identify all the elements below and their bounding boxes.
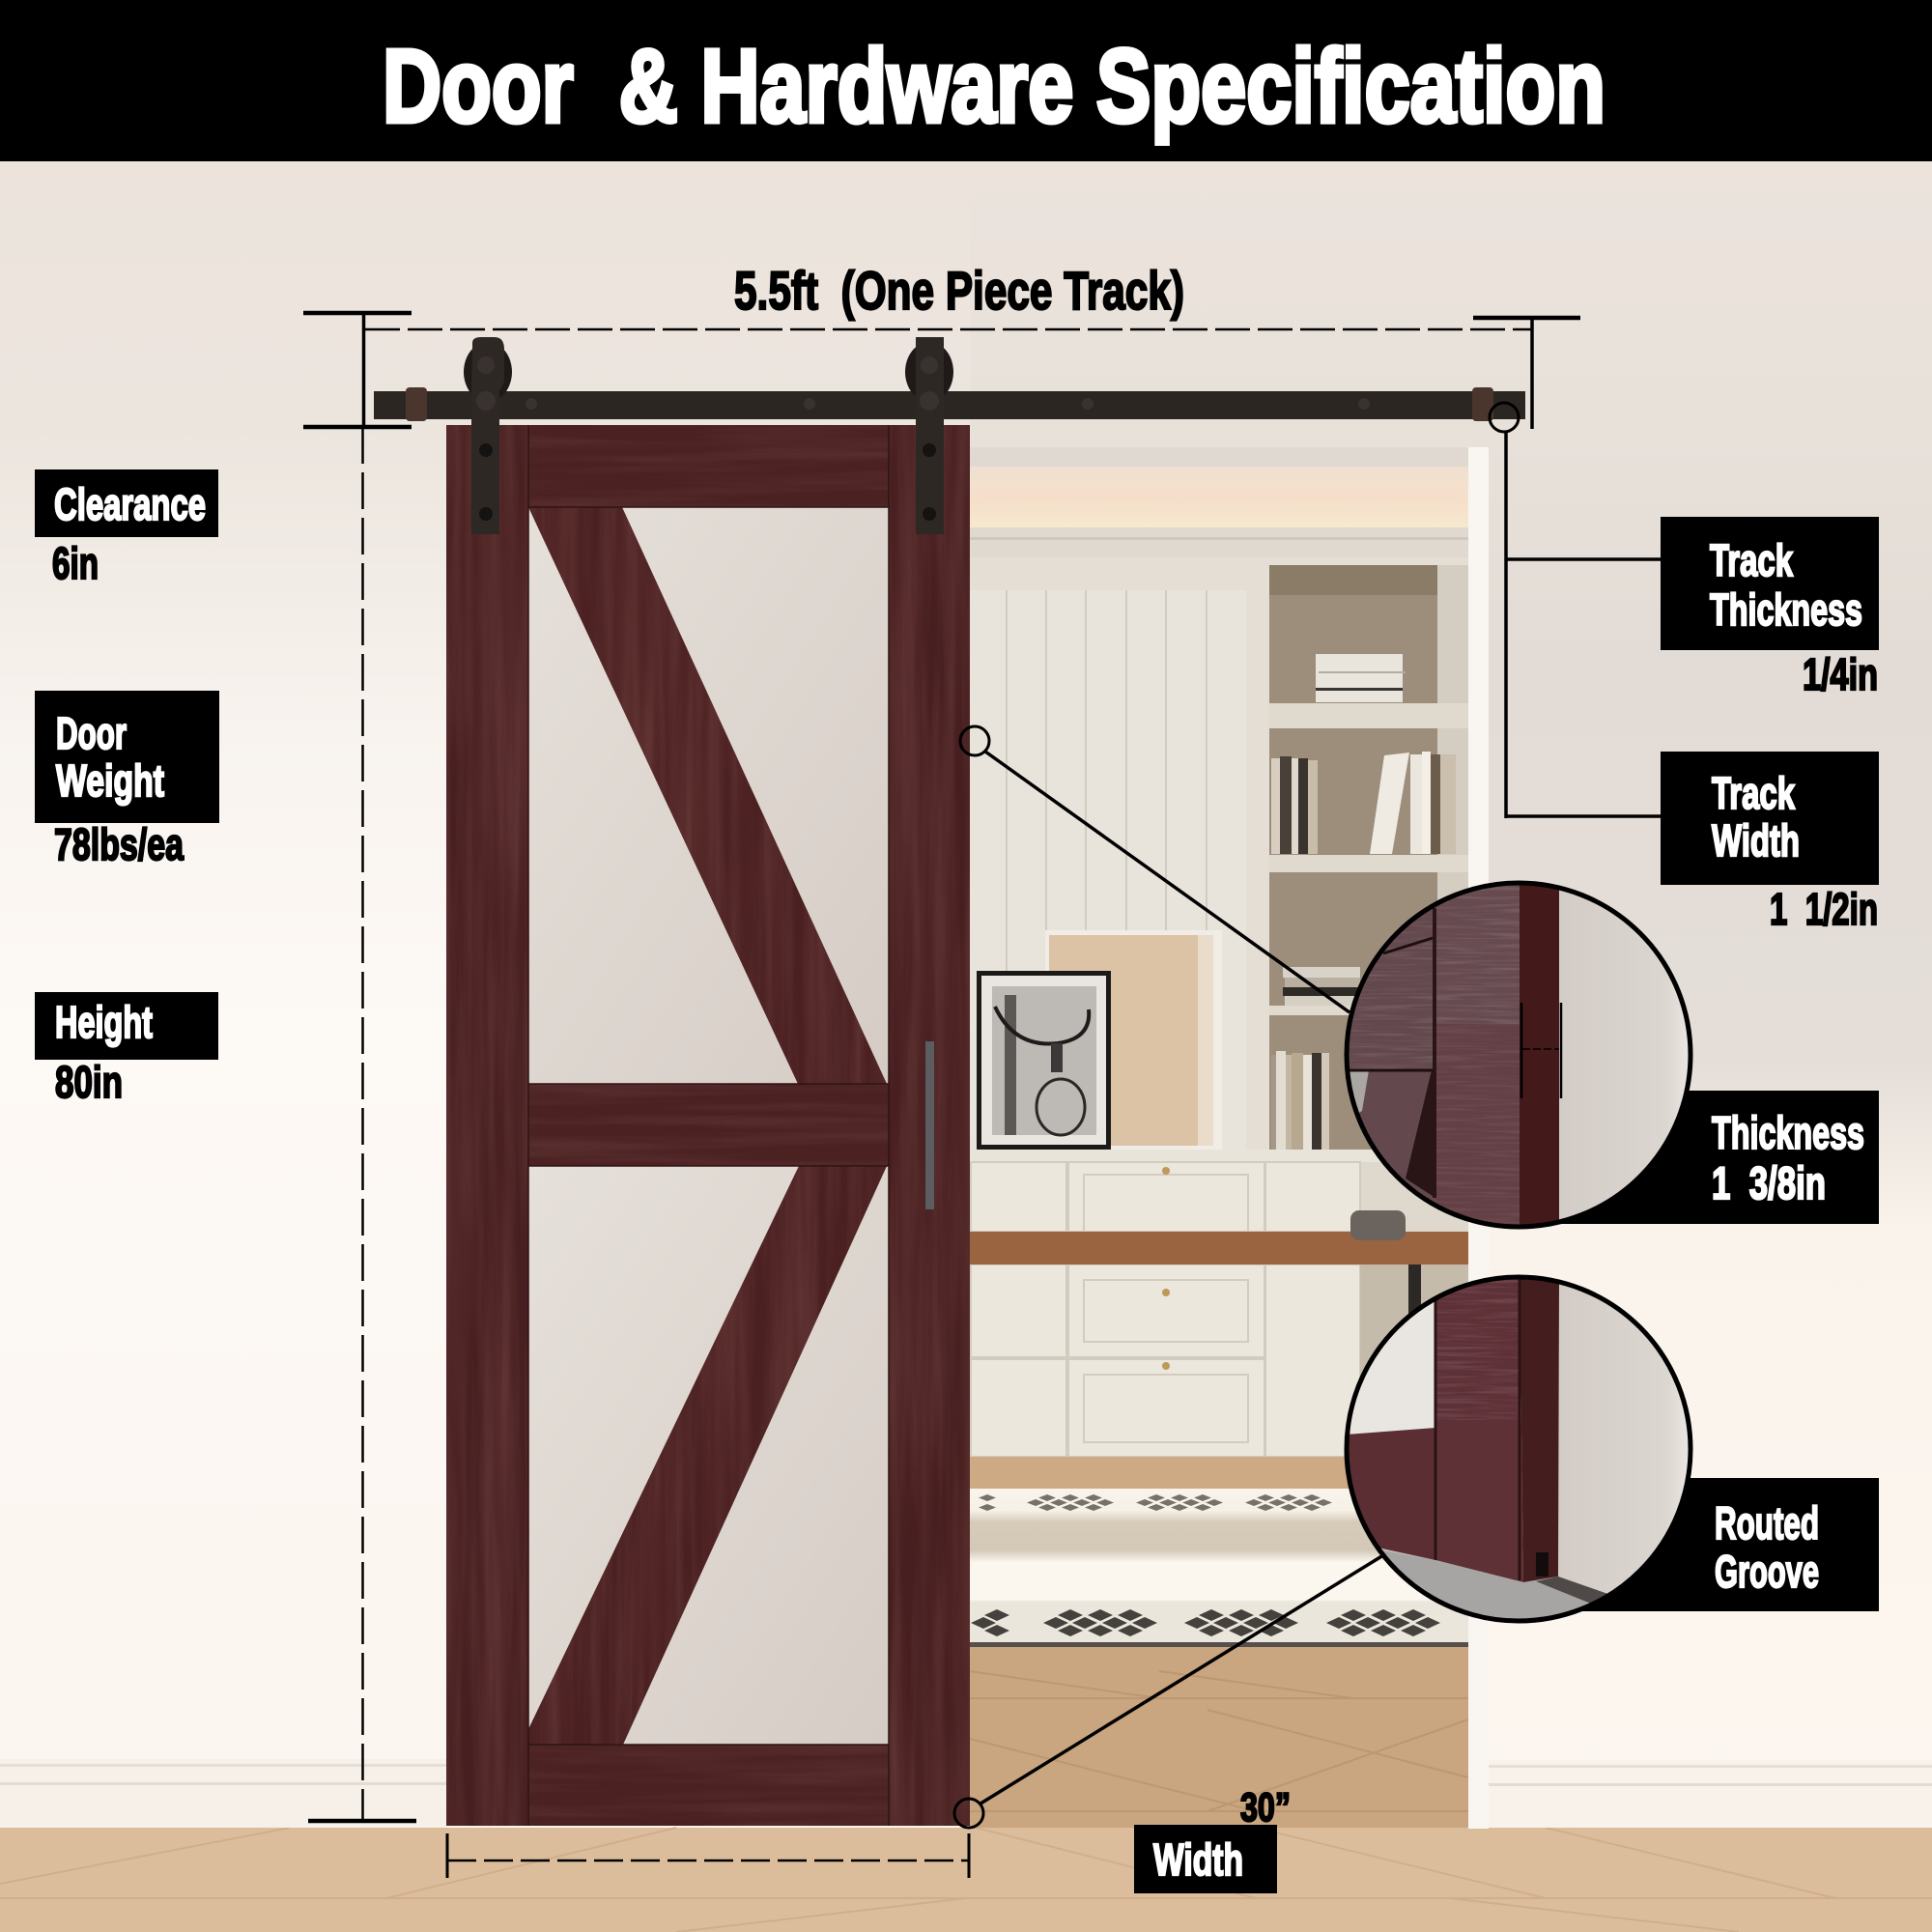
doorway interior room [970, 447, 1489, 1829]
floor [0, 1828, 1932, 1932]
room floor [970, 1457, 1468, 1491]
title banner: Door & Hardware Specification [383, 27, 1605, 144]
framed bicycle photo [977, 971, 1111, 1150]
label: track thickness: Thickness [1710, 584, 1862, 635]
rug [970, 1489, 1468, 1647]
label: width [1134, 1784, 1291, 1893]
label: clearance: Clearance [54, 479, 206, 529]
label: clearance [35, 469, 218, 588]
cabinets [970, 1150, 1468, 1464]
label: thickness [1546, 1091, 1879, 1224]
label: clearance: 6in [52, 538, 99, 588]
label: width: 30” [1240, 1784, 1291, 1830]
callout lines [954, 403, 1661, 1828]
label: height: 80in [55, 1057, 123, 1107]
art print [1045, 930, 1222, 1150]
label: routed groove [1546, 1478, 1879, 1611]
barn door [446, 425, 970, 1826]
door jamb [1468, 447, 1489, 1829]
dimension: clearance and height [303, 313, 416, 1821]
books [1271, 654, 1456, 1150]
label: door weight: Weight [56, 755, 164, 806]
shelving unit [1246, 557, 1468, 1162]
diagonal braces [528, 507, 889, 1745]
dimension: door width [447, 1833, 969, 1878]
label: height: Height [55, 997, 153, 1047]
title banner [0, 0, 1932, 161]
label: track width: 1 1/2in [1770, 884, 1878, 934]
label: door weight [35, 691, 219, 869]
label: track width: Track [1712, 768, 1795, 818]
glass panels [528, 507, 889, 1745]
hanger left [464, 337, 512, 534]
track stops [406, 387, 1493, 421]
plank wall [970, 590, 1246, 1160]
table top [970, 1232, 1468, 1264]
label: routed groove: Routed [1715, 1497, 1819, 1548]
label: door weight: 78lbs/ea [54, 819, 184, 869]
label: thickness: 1 3/8in [1712, 1157, 1826, 1208]
stiles and rails [446, 425, 970, 1826]
label: height [35, 992, 218, 1107]
door handle [925, 1041, 934, 1209]
hanger right [905, 337, 953, 534]
room floor foreground [970, 1647, 1468, 1828]
label: routed groove: Groove [1715, 1546, 1819, 1597]
label: track width: Width [1712, 815, 1800, 866]
detail circle: door thickness [1347, 882, 1694, 1230]
label: track thickness: Track [1710, 535, 1793, 585]
dimension: track length: 5.5ft (One Piece Track) [734, 260, 1184, 321]
label: track thickness: 1/4in [1803, 649, 1878, 699]
label: width: Width [1153, 1834, 1243, 1885]
sliding track [374, 387, 1525, 421]
label: door weight: Door [56, 708, 127, 758]
detail circle: routed groove [1347, 1275, 1694, 1625]
label: thickness: Thickness [1712, 1107, 1864, 1158]
label: track width [1661, 752, 1879, 934]
cup [1350, 1210, 1406, 1240]
label: track thickness [1661, 517, 1879, 699]
baseboards [0, 1759, 1932, 1828]
